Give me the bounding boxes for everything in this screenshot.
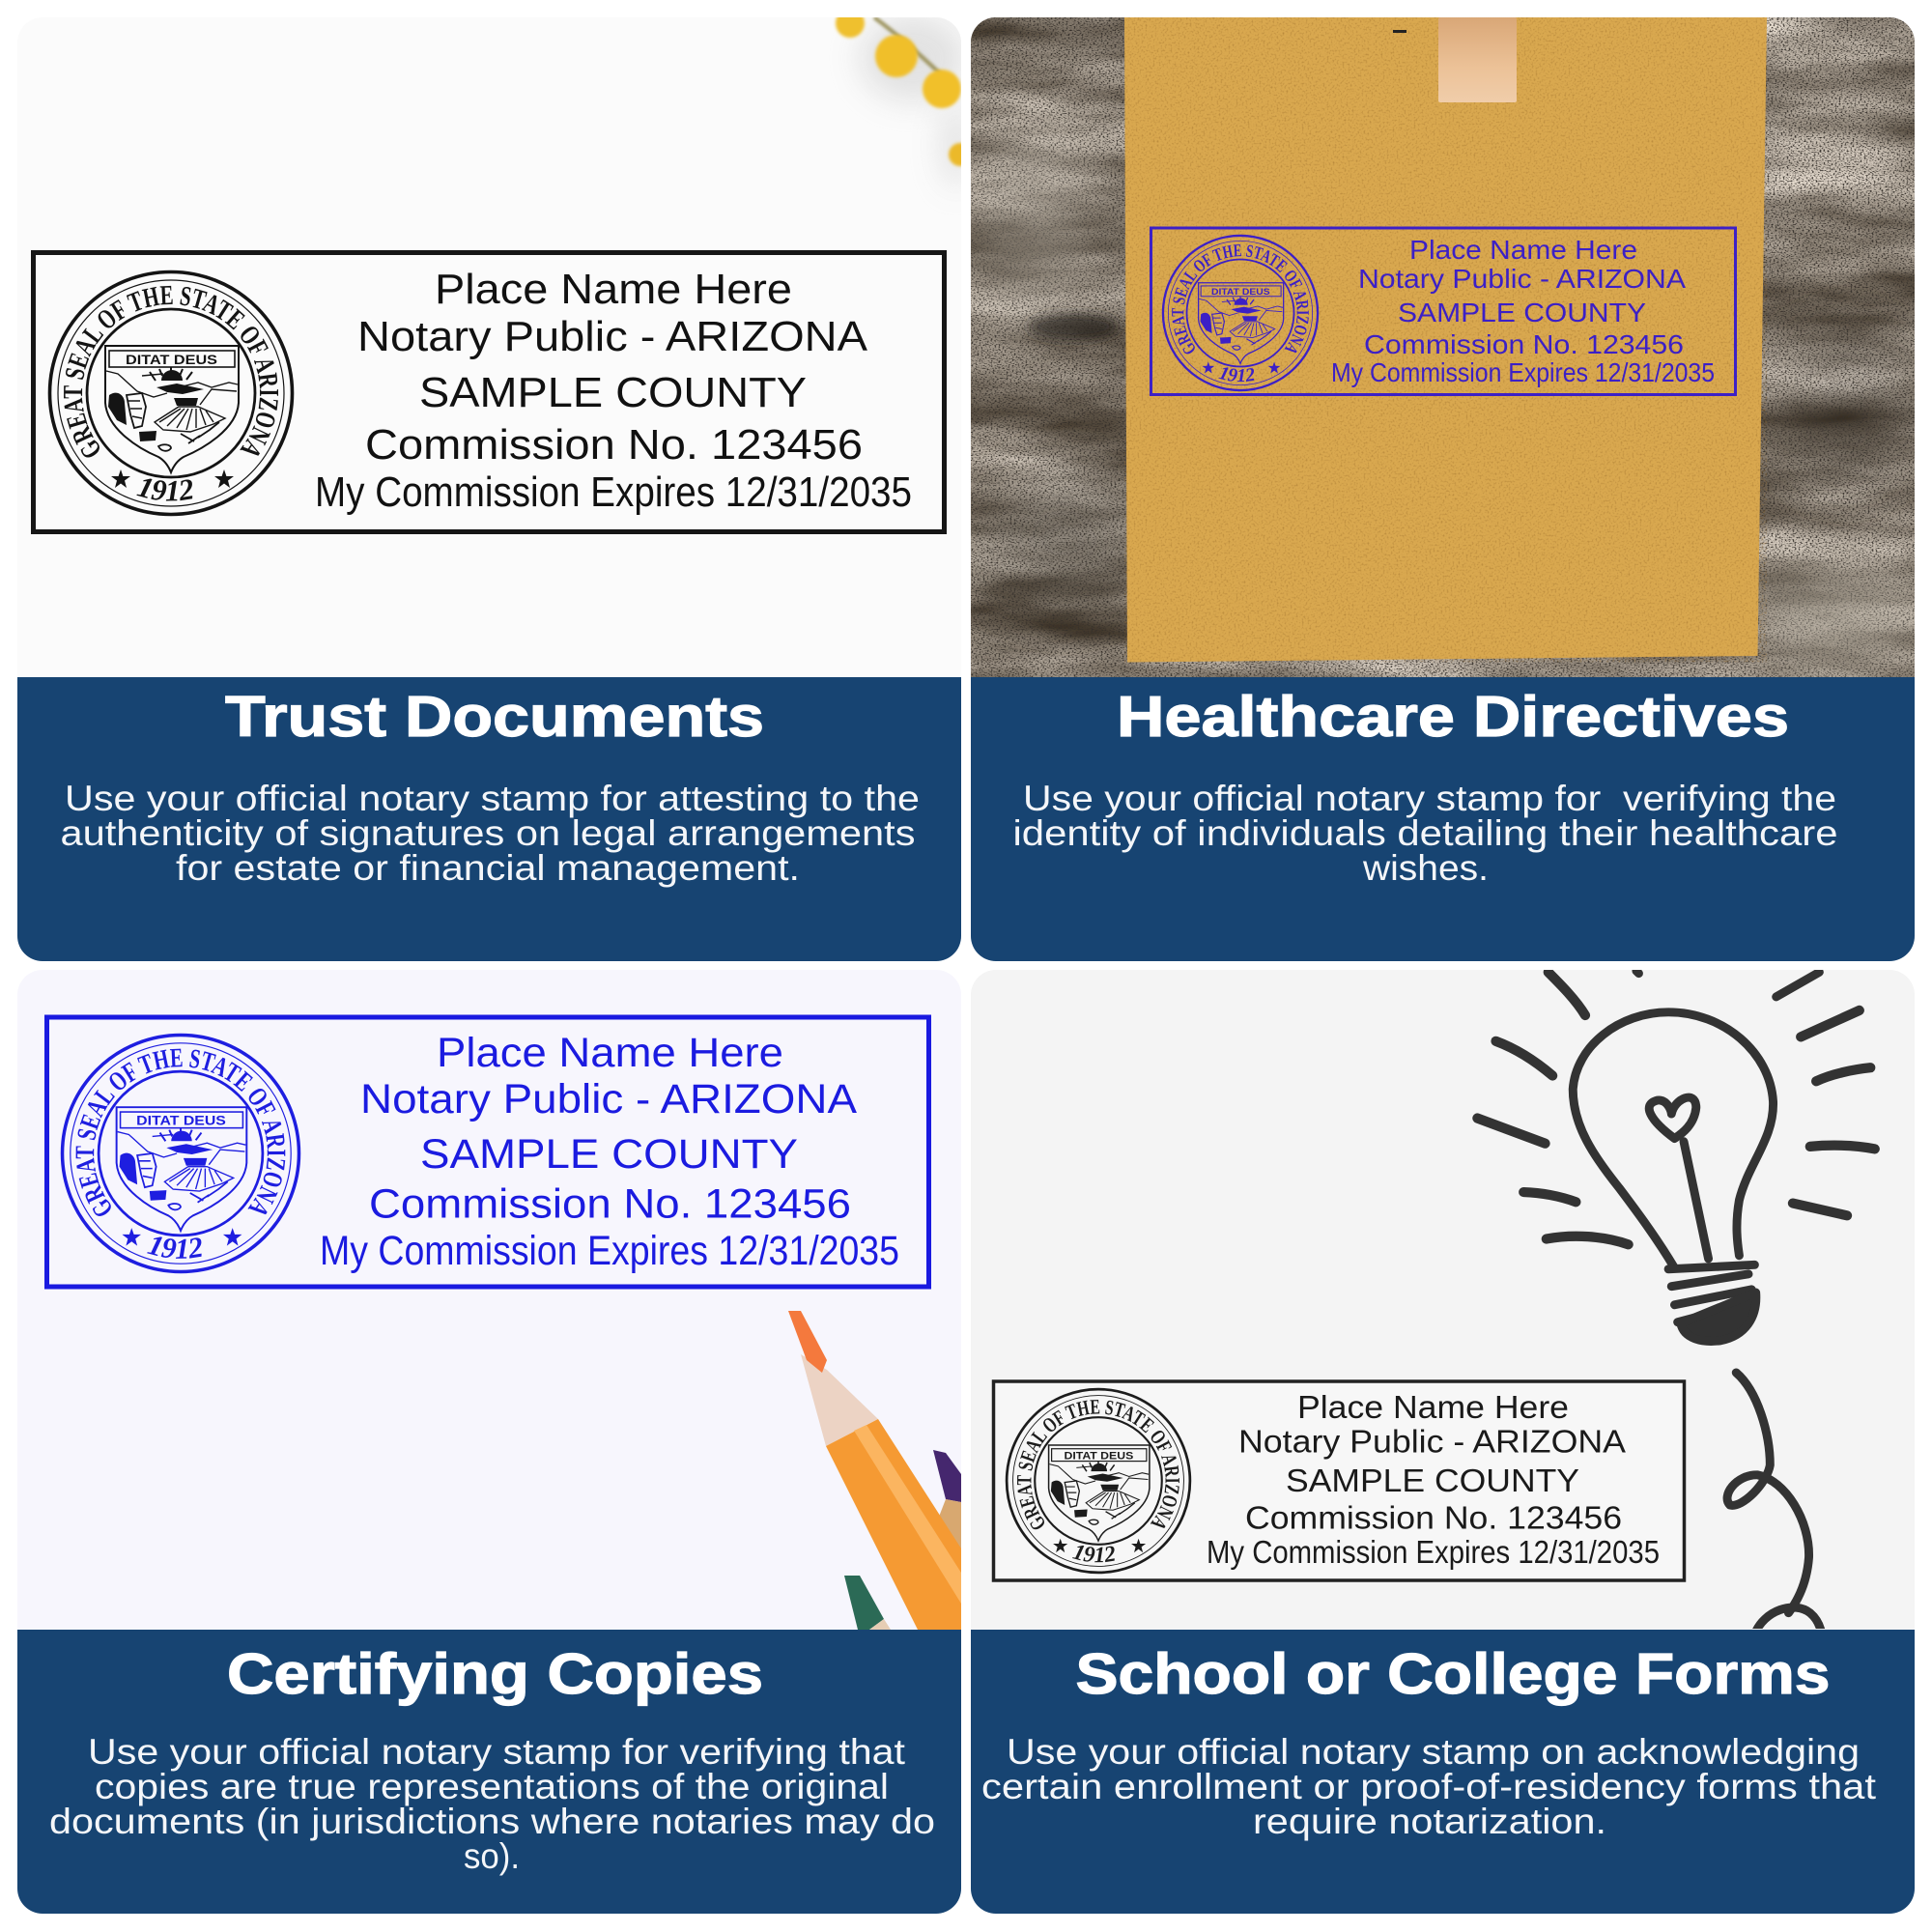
stamp text: SAMPLE COUNTY bbox=[1286, 1463, 1579, 1498]
seal of Arizona: 1912 bbox=[136, 479, 193, 500]
seal of Arizona: GREAT SEAL OF THE STATE OF ARIZONA bbox=[75, 1049, 286, 1216]
stamp text: Place Name Here bbox=[437, 1030, 783, 1076]
seal of Arizona: DITAT DEUS bbox=[136, 1114, 226, 1128]
heading: Trust Documents bbox=[225, 685, 764, 749]
seal of Arizona: 1912 bbox=[1218, 367, 1254, 383]
description: authenticity of signatures on legal arrangements bbox=[60, 813, 916, 853]
notary stamp: black bbox=[991, 1379, 1687, 1582]
stamp text: Commission No. 123456 bbox=[365, 421, 863, 469]
stamp text: Place Name Here bbox=[1297, 1389, 1569, 1425]
stamp text: SAMPLE COUNTY bbox=[420, 1131, 798, 1178]
seal of Arizona: GREAT SEAL OF THE STATE OF ARIZONA bbox=[1172, 244, 1309, 354]
description: so). bbox=[464, 1836, 520, 1876]
stamp text bbox=[320, 1030, 899, 1274]
caption panel bbox=[17, 677, 961, 961]
description: Use your official notary stamp for verifying that bbox=[88, 1732, 906, 1772]
stamp text: SAMPLE COUNTY bbox=[1398, 298, 1646, 327]
seal of Arizona: 1912 bbox=[147, 1236, 202, 1259]
description bbox=[1015, 784, 1836, 881]
stamp text: Commission No. 123456 bbox=[1245, 1499, 1622, 1536]
illustration: hand-drawn light bulb with squiggle bbox=[1477, 971, 1875, 1637]
panel: Certifying Copies bbox=[17, 970, 961, 1914]
stamp text: Commission No. 123456 bbox=[1364, 329, 1684, 359]
heading: School or College Forms bbox=[1076, 1642, 1830, 1706]
description: require notarization. bbox=[1253, 1802, 1606, 1841]
stamp text bbox=[1331, 235, 1715, 387]
panel: School or College Forms bbox=[971, 970, 1915, 1914]
stamp text: Notary Public - ARIZONA bbox=[357, 313, 868, 360]
seal of Arizona: DITAT DEUS bbox=[126, 352, 217, 367]
description: identity of individuals detailing their healthcare bbox=[1012, 813, 1837, 853]
seal of Arizona bbox=[1161, 234, 1320, 392]
stamp text: Place Name Here bbox=[1409, 235, 1637, 265]
stamp text: My Commission Expires 12/31/2035 bbox=[1331, 357, 1715, 387]
caption panel bbox=[971, 677, 1915, 961]
heading: Certifying Copies bbox=[227, 1642, 763, 1706]
seal of Arizona: GREAT SEAL OF THE STATE OF ARIZONA bbox=[1017, 1400, 1179, 1530]
notary stamp: black bbox=[31, 250, 947, 534]
stamp text bbox=[1207, 1389, 1660, 1570]
description: wishes. bbox=[1362, 848, 1489, 888]
description bbox=[49, 1732, 935, 1876]
stamp text: Notary Public - ARIZONA bbox=[1238, 1424, 1626, 1459]
stamp text: Notary Public - ARIZONA bbox=[360, 1076, 857, 1122]
kraft paper card bbox=[1124, 17, 1767, 663]
description: certain enrollment or proof-of-residency forms that bbox=[981, 1767, 1877, 1806]
stamp text: Commission No. 123456 bbox=[369, 1180, 851, 1227]
stamp text: Place Name Here bbox=[435, 266, 792, 313]
description: Use your official notary stamp for verifying the bbox=[1023, 779, 1836, 818]
photo background: weathered wood bbox=[971, 17, 1922, 677]
seal of Arizona: 1912 bbox=[1072, 1546, 1115, 1563]
caption panel bbox=[971, 1630, 1915, 1914]
description bbox=[981, 1732, 1877, 1841]
stamp text: Notary Public - ARIZONA bbox=[1358, 264, 1686, 294]
description: for estate or financial management. bbox=[176, 848, 800, 888]
heading: Healthcare Directives bbox=[1117, 685, 1789, 749]
seal of Arizona: DITAT DEUS bbox=[1064, 1450, 1133, 1462]
decoration: coloured pencils bbox=[788, 1311, 961, 1630]
caption panel bbox=[17, 1630, 961, 1914]
seal of Arizona: GREAT SEAL OF THE STATE OF ARIZONA bbox=[64, 286, 278, 458]
panel: Healthcare Directives bbox=[971, 17, 1915, 961]
seal of Arizona: DITAT DEUS bbox=[1211, 287, 1270, 297]
description: Use your official notary stamp on acknowledging bbox=[1007, 1732, 1860, 1772]
description: copies are true representations of the original bbox=[95, 1767, 889, 1806]
stamp text: My Commission Expires 12/31/2035 bbox=[320, 1228, 899, 1274]
photo background: grey white paper bbox=[971, 970, 1915, 1630]
stamp text bbox=[315, 266, 912, 516]
stamp text: My Commission Expires 12/31/2035 bbox=[315, 469, 912, 516]
description bbox=[60, 779, 920, 888]
stamp text: My Commission Expires 12/31/2035 bbox=[1207, 1534, 1660, 1570]
stamp text: SAMPLE COUNTY bbox=[419, 369, 807, 416]
description: Use your official notary stamp for attesting to the bbox=[65, 779, 920, 818]
notary stamp: blue bbox=[44, 1014, 931, 1289]
decoration: yellow mimosa flowers bbox=[833, 17, 961, 182]
description: documents (in jurisdictions where notaries may do bbox=[49, 1802, 935, 1841]
photo background: white paper bbox=[17, 17, 961, 677]
photo background: lavender white paper bbox=[17, 970, 961, 1630]
wooden clothespin bbox=[1438, 17, 1517, 102]
panel: Trust Documents bbox=[17, 17, 961, 961]
notary stamp: blue on kraft bbox=[1150, 226, 1737, 396]
